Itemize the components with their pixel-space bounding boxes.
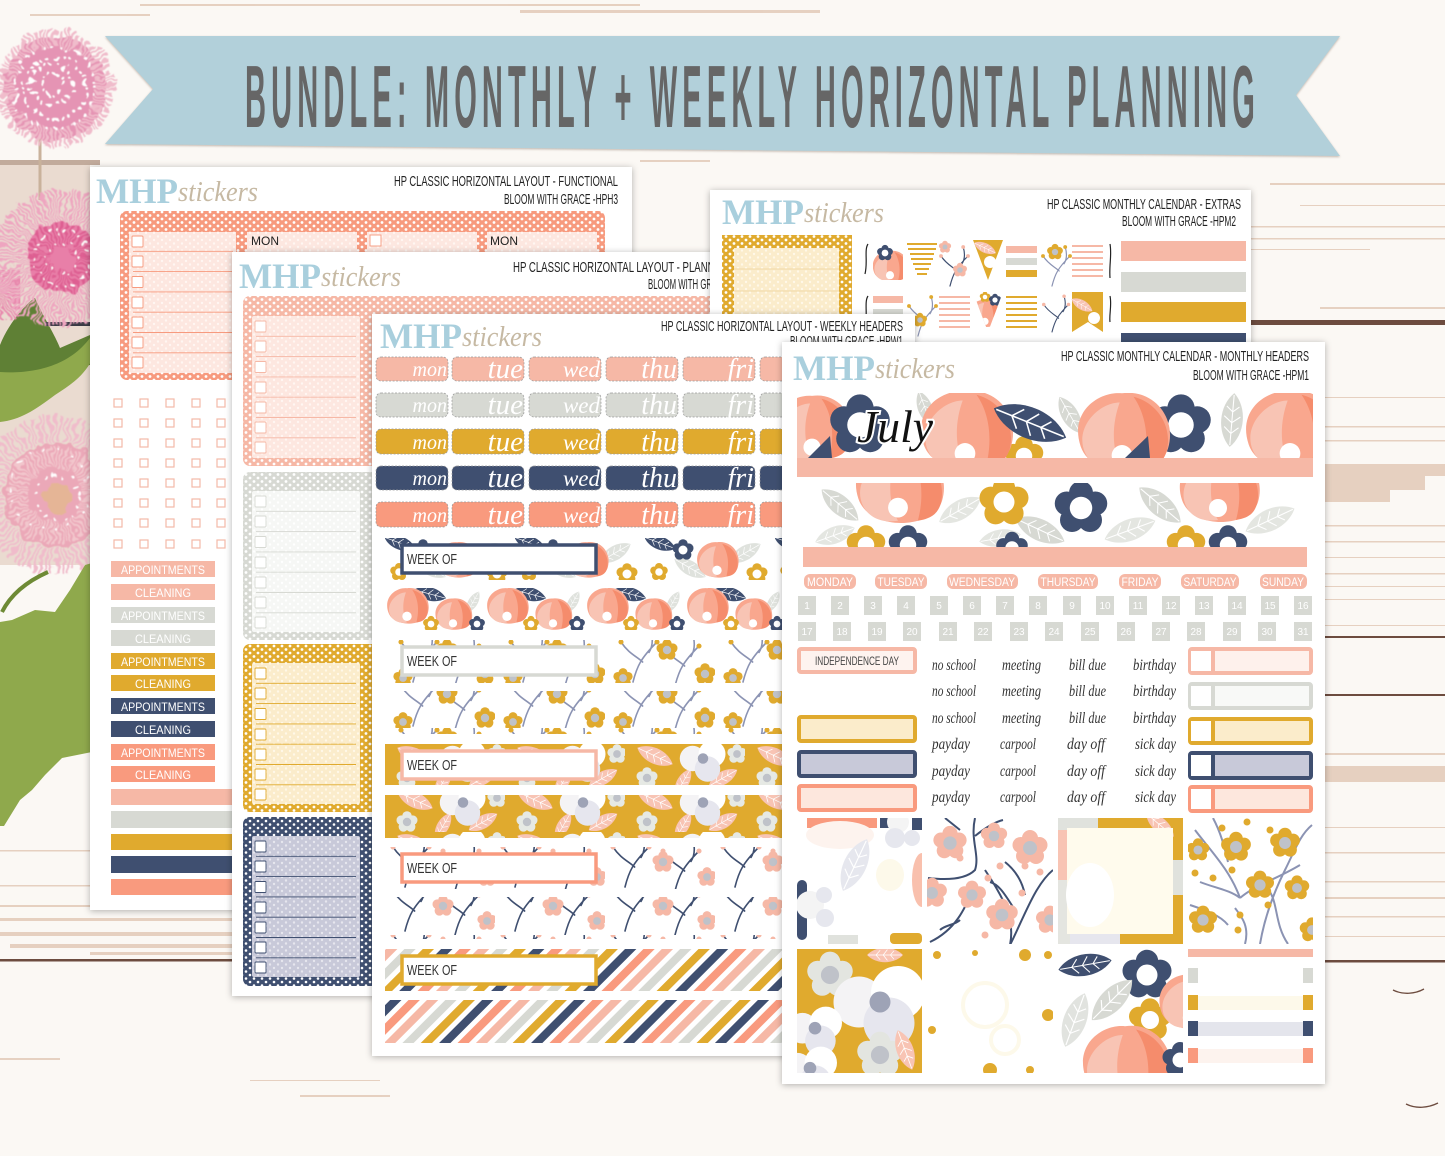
date stickers 1 to 16: 6 [969, 601, 975, 612]
logo: stickers [178, 177, 258, 208]
date stickers 17 to 31 [798, 622, 1312, 641]
week-of strip: gray on mustard berries: WEEK OF [407, 653, 457, 670]
banner flags row 2 [865, 292, 1111, 336]
weekday tabs: gray: thu [641, 390, 677, 421]
sheet header text: HP CLASSIC HORIZONTAL LAYOUT - PLANNER [513, 260, 728, 276]
logo: MHP [722, 192, 804, 232]
weekday tabs: mustard [376, 426, 832, 458]
week-of strip: navy floral [385, 538, 785, 580]
right checkbox labels [1190, 649, 1311, 811]
weekday labels: THURSDAY [1040, 577, 1096, 589]
appointment and cleaning labels: CLEANING [135, 632, 191, 646]
sheet header text: BLOOM WITH GRACE -HPM1 [1193, 368, 1309, 384]
weekday tabs: salmon: thu [641, 500, 677, 531]
lower green leaf [0, 563, 92, 826]
tile: gray leaves, navy flower, salmon poppy [1058, 950, 1183, 1073]
date stickers 17 to 31: 26 [1120, 627, 1132, 638]
weekday tabs: peach: fri [728, 354, 754, 385]
dotted salmon planner box: MON [251, 234, 279, 248]
script task labels: bill due [1069, 657, 1106, 674]
floral month header with July [797, 393, 1313, 458]
date stickers 17 to 31: 21 [942, 627, 954, 638]
date stickers 1 to 16: 1 [804, 601, 810, 612]
week-of strip: mustard on stripes [385, 949, 785, 991]
banner flags row 1 [865, 239, 1111, 286]
script task labels: payday [931, 736, 971, 753]
date stickers 1 to 16: 9 [1069, 601, 1075, 612]
appointment and cleaning labels: APPOINTMENTS [121, 700, 205, 714]
script task labels: bill due [1069, 683, 1106, 700]
weekday labels [804, 574, 1307, 589]
logo: MHP [96, 171, 178, 211]
mustard note box [722, 235, 852, 338]
tile: mustard floral with pale box [1058, 808, 1183, 944]
date stickers 17 to 31: 22 [977, 627, 989, 638]
week-of strip: peach on mustard floral: WEEK OF [407, 757, 457, 774]
appointment and cleaning labels: CLEANING [135, 768, 191, 782]
bottom-right mini strips [1188, 949, 1313, 1063]
week-of strip: salmon on navy branches: WEEK OF [407, 860, 457, 877]
sheet header text [1061, 349, 1309, 384]
large green leaf [0, 335, 92, 422]
script task labels: no school [932, 710, 976, 727]
date stickers 1 to 16: 5 [936, 601, 942, 612]
week-of strip: peach on mustard floral [385, 744, 785, 785]
date stickers 17 to 31: 20 [906, 627, 918, 638]
sheet header text: BLOOM WITH GRACE -HPH3 [504, 192, 618, 208]
title banner [105, 36, 1340, 156]
logo: MHP [239, 256, 321, 296]
independence day label: INDEPENDENCE DAY [815, 656, 899, 668]
logo: stickers [321, 262, 401, 293]
date stickers 17 to 31: 28 [1190, 627, 1202, 638]
weekday tabs: salmon: tue [488, 499, 523, 531]
weekday tabs: navy: tue [488, 462, 523, 494]
weekday tabs: mustard: tue [488, 426, 523, 458]
floral month header 2 [816, 483, 1294, 547]
weekday tabs: salmon [376, 499, 832, 531]
date stickers 17 to 31: 24 [1048, 627, 1060, 638]
script task labels: payday [931, 789, 971, 806]
weekday tabs: salmon: mon [413, 505, 447, 527]
date stickers 17 to 31: 23 [1013, 627, 1025, 638]
weekday tabs: mustard: fri [728, 427, 754, 458]
date stickers 1 to 16: 13 [1198, 601, 1210, 612]
script task labels: carpool [1000, 789, 1036, 806]
weekday tabs: peach: thu [641, 354, 677, 385]
script task labels: day off [1067, 736, 1107, 753]
tile: peach flowers and navy branches [927, 818, 1053, 944]
weekday tabs: navy: wed [563, 466, 600, 491]
date stickers 17 to 31: 18 [836, 627, 848, 638]
weekday tabs: gray: fri [728, 390, 754, 421]
date stickers 1 to 16: 12 [1165, 601, 1177, 612]
date stickers 17 to 31: 31 [1297, 627, 1309, 638]
sheet header text: HP CLASSIC HORIZONTAL LAYOUT - FUNCTIONAL [394, 174, 618, 190]
weekday tabs: peach: wed [563, 357, 600, 382]
tile: faded berries [927, 949, 1054, 1077]
appointment and cleaning labels: CLEANING [135, 723, 191, 737]
sheet header text: HP CLASSIC MONTHLY CALENDAR - EXTRAS [1047, 197, 1241, 213]
weekday tabs: peach: tue [488, 353, 523, 385]
sheet header text: HP CLASSIC HORIZONTAL LAYOUT - WEEKLY HEADERS [661, 319, 903, 335]
date stickers 1 to 16: 3 [870, 601, 876, 612]
sheet header text: BLOOM WITH GRACE -HPM2 [1122, 214, 1236, 230]
script task labels: sick day [1135, 736, 1177, 753]
date stickers 1 to 16: 2 [837, 601, 843, 612]
colour strips [111, 789, 236, 895]
weekday tabs: gray [376, 389, 832, 421]
weekday tabs: navy: thu [641, 463, 677, 494]
sheet header text: BLOOM WITH GRACE -HPW1 [790, 334, 903, 350]
appointment and cleaning labels: CLEANING [135, 677, 191, 691]
dotted salmon planner box: MON [490, 234, 518, 248]
date stickers 1 to 16: 4 [903, 601, 909, 612]
weekday tabs: mustard: wed [563, 430, 600, 455]
weekday labels: WEDNESDAY [949, 577, 1015, 589]
lower stem [2, 572, 48, 612]
sheet header text [661, 319, 903, 350]
logo: stickers [462, 322, 542, 353]
date stickers 17 to 31: 27 [1155, 627, 1167, 638]
script task labels: birthday [1133, 657, 1177, 674]
sheet: monthly headers (HPM1) [776, 342, 1338, 1101]
script task labels: day off [1067, 763, 1107, 780]
mustard planner box [243, 644, 378, 812]
date stickers 1 to 16: 8 [1035, 601, 1041, 612]
script task labels: meeting [1002, 683, 1041, 700]
logo [722, 192, 884, 232]
weekday tabs: salmon: wed [563, 503, 600, 528]
date stickers 1 to 16: 14 [1231, 601, 1243, 612]
script task labels: no school [932, 657, 976, 674]
date stickers 17 to 31: 29 [1226, 627, 1238, 638]
weekday tabs: navy: mon [413, 468, 447, 490]
script task labels: day off [1067, 789, 1107, 806]
sheet: weekly headers (HPW1) [372, 314, 915, 1056]
stems and dark leaf [0, 125, 90, 375]
striped strip [385, 1000, 785, 1043]
date stickers 17 to 31: 17 [801, 627, 813, 638]
logo: MHP [380, 316, 462, 356]
independence day label [799, 649, 915, 672]
appointment and cleaning labels: CLEANING [135, 586, 191, 600]
weekday labels: SUNDAY [1262, 577, 1304, 589]
date stickers 1 to 16: 10 [1099, 601, 1111, 612]
weekday tabs: mustard: mon [413, 432, 447, 454]
week-of strip: navy floral: WEEK OF [407, 551, 457, 568]
dotted salmon planner box [120, 211, 605, 380]
logo [239, 256, 401, 296]
weekday tabs: salmon: fri [728, 500, 754, 531]
left colour boxes [799, 717, 915, 810]
week-of strip: gray on mustard berries [385, 640, 785, 683]
date stickers 1 to 16 [798, 596, 1312, 615]
appointment and cleaning labels: APPOINTMENTS [121, 609, 205, 623]
appointment and cleaning labels: APPOINTMENTS [121, 746, 205, 760]
navy planner box [243, 817, 378, 986]
logo: stickers [804, 198, 884, 229]
weekday tabs: gray: wed [563, 393, 600, 418]
script task labels: meeting [1002, 657, 1041, 674]
gray planner box [243, 472, 378, 640]
date stickers 17 to 31: 25 [1084, 627, 1096, 638]
floral strip: poppies [385, 588, 785, 630]
appointment and cleaning labels: APPOINTMENTS [121, 563, 205, 577]
sheet: monthly extras (HPM2) [710, 190, 1251, 360]
weekday labels: MONDAY [807, 577, 853, 589]
middle pink flower [10, 206, 114, 310]
sheet: functional stickers (HPH3) [90, 167, 632, 910]
logo: MHP [793, 348, 875, 388]
weekday tabs: peach: mon [413, 359, 447, 381]
script task labels: birthday [1133, 710, 1177, 727]
weekday tabs: gray: mon [413, 395, 447, 417]
script task labels: meeting [1002, 710, 1041, 727]
tile: faded leaf [797, 818, 922, 944]
weekday tabs: navy [376, 462, 832, 494]
date stickers 17 to 31: 19 [871, 627, 883, 638]
date stickers 1 to 16: 11 [1133, 601, 1144, 612]
week-of strip: salmon on navy branches [385, 847, 785, 889]
weekday tabs: navy: fri [728, 463, 754, 494]
appointment and cleaning labels [111, 561, 215, 782]
week-of strip: mustard on stripes: WEEK OF [407, 962, 457, 979]
script task labels: payday [931, 763, 971, 780]
script task labels: sick day [1135, 789, 1177, 806]
colour bars [1121, 241, 1246, 353]
script task labels: no school [932, 683, 976, 700]
weekday labels: SATURDAY [1184, 577, 1237, 589]
floral arrangement: pink flowers and green leaves [0, 36, 121, 826]
weekday labels: TUESDAY [878, 577, 925, 589]
tile: mustard flowers and gray branches [1187, 818, 1324, 944]
sheet header text: BLOOM WITH GRACE [648, 277, 728, 293]
sheet header text [394, 174, 618, 208]
floral strip: navy branches [385, 897, 785, 939]
lower pink flower [0, 429, 121, 561]
month name: July [857, 401, 934, 452]
date stickers 1 to 16: 16 [1297, 601, 1309, 612]
date stickers 1 to 16: 7 [1002, 601, 1008, 612]
sheet: planner layout [232, 252, 728, 996]
script task labels [931, 657, 1177, 806]
tile: mustard with white flowers [797, 949, 922, 1073]
logo: stickers [875, 354, 955, 385]
logo [380, 316, 542, 356]
date stickers 1 to 16: 15 [1264, 601, 1276, 612]
date stickers 17 to 31: 30 [1261, 627, 1273, 638]
script task labels: sick day [1135, 763, 1177, 780]
sheet header text [513, 260, 728, 293]
peach header bar [797, 458, 1313, 477]
script task labels: bill due [1069, 710, 1106, 727]
peach planner box [243, 296, 723, 466]
sheet header text [1047, 197, 1241, 230]
appointment and cleaning labels: APPOINTMENTS [121, 655, 205, 669]
banner title: BUNDLE: MONTHLY + WEEKLY HORIZONTAL PLANNING [245, 48, 1255, 146]
floral strip: mustard berries [385, 691, 785, 734]
small left pink flower [0, 277, 13, 313]
script task labels: carpool [1000, 763, 1036, 780]
script task labels: birthday [1133, 683, 1177, 700]
weekday tabs: peach [376, 353, 832, 385]
weekday tabs: gray: tue [488, 389, 523, 421]
top pink flower [3, 36, 107, 140]
peach header bar 2 [803, 547, 1307, 567]
script task labels: carpool [1000, 736, 1036, 753]
logo [96, 171, 258, 211]
weekday labels: FRIDAY [1122, 577, 1159, 589]
logo [793, 348, 955, 388]
floral strip: mustard floral [385, 795, 785, 838]
weekday tabs: mustard: thu [641, 427, 677, 458]
checkbox grid [114, 399, 225, 548]
